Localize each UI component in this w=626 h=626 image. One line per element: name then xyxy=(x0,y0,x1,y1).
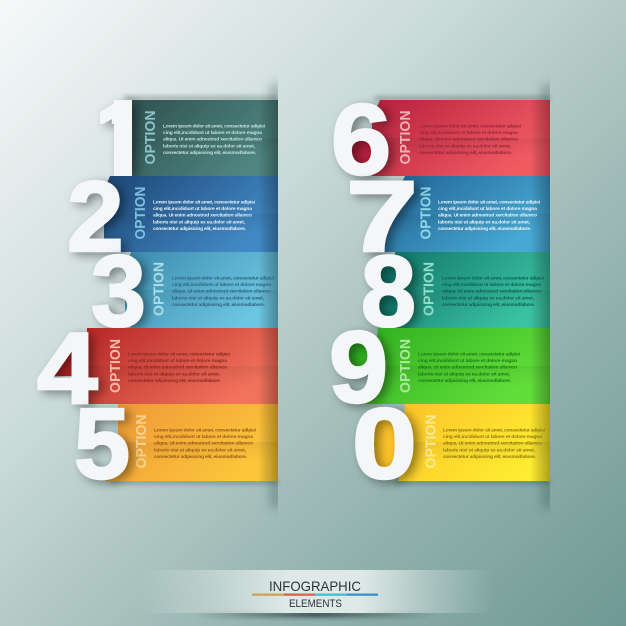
text block 7: aliqua. Ut enim adnostrud xercitation ullamco xyxy=(438,213,537,219)
bar 0 xyxy=(398,404,550,481)
shadow below right bars xyxy=(395,480,550,484)
text block 2: Lorem ipsum dolor sit amet, consectetur adipisi xyxy=(153,200,256,206)
bar 6 xyxy=(372,100,550,176)
option label 3: OPTION xyxy=(151,262,168,316)
text block 0: consectetur adipisicing elit, eiusmodlabore. xyxy=(443,454,537,460)
bar 3 xyxy=(125,252,278,328)
colour rule xyxy=(252,594,378,596)
text block 5 xyxy=(154,428,257,460)
text block 9: laboris nisi ut aliquip ex ea.dolor sit amet, xyxy=(418,371,511,377)
text block 0: aliqua. Ut enim adnostrud xercitation ullamco xyxy=(443,441,542,447)
counter of digit 4 xyxy=(48,346,74,376)
digit 1 xyxy=(99,96,141,176)
text block 1: laboris nisi ut aliquip ex ea.dolor sit amet, xyxy=(163,143,256,149)
text block 8: cing elit,incididunt ut labore et dolore magna xyxy=(442,282,541,288)
text block 1: cing elit,incididunt ut labore et dolore magna xyxy=(163,130,262,136)
row 7 xyxy=(346,160,550,273)
text block 0: laboris nisi ut aliquip ex ea.dolor sit amet, xyxy=(443,447,536,453)
title: infographic: INFOGRAPHIC xyxy=(269,579,361,594)
counter of digit 9 xyxy=(342,338,374,370)
text block 7 xyxy=(438,200,541,232)
text block 6: aliqua. Ut enim adnostrud xercitation ullamco xyxy=(419,137,518,143)
option label 0: OPTION xyxy=(423,414,440,468)
option label 8: OPTION xyxy=(421,262,438,316)
text block 4 xyxy=(128,352,231,384)
text block 6: consectetur adipisicing elit, eiusmodlabore. xyxy=(419,150,513,156)
text block 0 xyxy=(443,428,546,460)
text block 4: laboris nisi ut aliquip ex ea.dolor sit amet, xyxy=(128,371,221,377)
text block 5: aliqua. Ut enim adnostrud xercitation ullamco xyxy=(154,441,253,447)
bar 1 xyxy=(130,100,278,176)
text block 2: laboris nisi ut aliquip ex ea.dolor sit amet, xyxy=(153,219,246,225)
option label 6: OPTION xyxy=(398,110,414,164)
digit 1: 1 xyxy=(88,83,148,196)
bottom title banner xyxy=(140,570,492,617)
text block 9 xyxy=(418,352,521,384)
text block 8 xyxy=(442,276,545,308)
row 5 xyxy=(74,388,278,500)
shadow above the right bars xyxy=(375,96,550,101)
banner strip xyxy=(140,570,492,613)
text block 8: consectetur adipisicing elit, eiusmodlabore. xyxy=(442,302,536,308)
option label 9: OPTION xyxy=(398,339,414,393)
digit 8: 8 xyxy=(361,236,416,348)
row 8 xyxy=(361,236,550,348)
panel: left column fold shadow xyxy=(270,84,282,508)
counter of digit 0 xyxy=(367,413,403,473)
bar 7 xyxy=(366,176,550,252)
text block 3: cing elit,incididunt ut labore et dolore magna xyxy=(172,282,271,288)
text block 6: cing elit,incididunt ut labore et dolore magna xyxy=(419,130,518,136)
text block 2: consectetur adipisicing elit, eiusmodlabore. xyxy=(153,226,247,232)
text block 5: laboris nisi ut aliquip ex ea.dolor sit amet, xyxy=(154,447,247,453)
option label 5: OPTION xyxy=(134,414,150,468)
shadow above the left bars xyxy=(125,96,278,101)
digit 2: 2 xyxy=(67,160,124,273)
text block 4: Lorem ipsum dolor sit amet, consectetur adipisi xyxy=(128,352,231,358)
text block 8: aliqua. Ut enim adnostrud xercitation ullamco xyxy=(442,289,541,295)
text block 3: laboris nisi ut aliquip ex ea.dolor sit amet, xyxy=(172,295,265,301)
text block 5: consectetur adipisicing elit, eiusmodlabore. xyxy=(154,454,248,460)
row 4 xyxy=(37,313,278,425)
text block 7: cing elit,incididunt ut labore et dolore magna xyxy=(438,206,537,212)
text block 9: consectetur adipisicing elit, eiusmodlabore. xyxy=(418,378,512,384)
option label 7: OPTION xyxy=(417,187,434,240)
text block 3: consectetur adipisicing elit, eiusmodlabore. xyxy=(172,302,266,308)
text block 4: consectetur adipisicing elit, eiusmodlabore. xyxy=(128,378,222,384)
text block 4: aliqua. Ut enim adnostrud xercitation ullamco xyxy=(128,365,227,371)
text block 2: cing elit,incididunt ut labore et dolore magna xyxy=(153,206,252,212)
digit 3: 3 xyxy=(91,236,146,348)
row 2 xyxy=(67,160,278,273)
digit 7: 7 xyxy=(346,160,418,273)
row 9 xyxy=(329,310,550,423)
bar 2 xyxy=(104,176,278,252)
shadow below left bars xyxy=(110,480,278,484)
text block 5: cing elit,incididunt ut labore et dolore magna xyxy=(154,434,253,440)
text block 7: laboris nisi ut aliquip ex ea.dolor sit amet, xyxy=(438,219,531,225)
digit 9: 9 xyxy=(329,310,388,423)
text block 3 xyxy=(172,276,275,308)
text block 4: cing elit,incididunt ut labore et dolore magna xyxy=(128,358,227,364)
row 3 xyxy=(91,236,278,348)
text block 3: aliqua. Ut enim adnostrud xercitation ullamco xyxy=(172,289,271,295)
subtitle: elements: ELEMENTS xyxy=(289,598,342,610)
text block 3: Lorem ipsum dolor sit amet, consectetur adipisi xyxy=(172,276,275,282)
option label 4: OPTION xyxy=(108,339,124,393)
text block 2 xyxy=(153,200,256,232)
text block 1: aliqua. Ut enim adnostrud xercitation ullamco xyxy=(163,137,262,143)
text block 5: Lorem ipsum dolor sit amet, consectetur adipisi xyxy=(154,428,257,434)
panel: middle column fold shadow xyxy=(542,84,554,508)
text block 2: aliqua. Ut enim adnostrud xercitation ullamco xyxy=(153,213,252,219)
text block 0: cing elit,incididunt ut labore et dolore magna xyxy=(443,434,542,440)
bar 8 xyxy=(395,252,550,328)
text block 8: Lorem ipsum dolor sit amet, consectetur adipisi xyxy=(442,276,545,282)
text block 6 xyxy=(419,124,522,156)
text block 7: Lorem ipsum dolor sit amet, consectetur adipisi xyxy=(438,200,541,206)
bar 5 xyxy=(105,404,278,481)
text block 1: consectetur adipisicing elit, eiusmodlabore. xyxy=(163,150,257,156)
text block 7: consectetur adipisicing elit, eiusmodlabore. xyxy=(438,226,532,232)
counters of digit 8 xyxy=(375,261,401,319)
row 6 xyxy=(331,83,550,196)
counter of digit 6 xyxy=(345,135,377,167)
digit 4: 4 xyxy=(37,313,98,425)
text block 0: Lorem ipsum dolor sit amet, consectetur adipisi xyxy=(443,428,546,434)
row 1 xyxy=(99,96,278,176)
text block 9: aliqua. Ut enim adnostrud xercitation ullamco xyxy=(418,365,517,371)
text block 8: laboris nisi ut aliquip ex ea.dolor sit amet, xyxy=(442,295,535,301)
option label 2: OPTION xyxy=(132,187,148,240)
bar 4 xyxy=(87,328,278,404)
text block 6: laboris nisi ut aliquip ex ea.dolor sit amet, xyxy=(419,143,512,149)
text block 9: Lorem ipsum dolor sit amet, consectetur adipisi xyxy=(418,352,521,358)
text block 6: Lorem ipsum dolor sit amet, consectetur adipisi xyxy=(419,124,522,130)
bar 9 xyxy=(362,328,550,404)
digit 5: 5 xyxy=(74,388,130,500)
text block 9: cing elit,incididunt ut labore et dolore magna xyxy=(418,358,517,364)
row 0 xyxy=(352,387,550,500)
option label 1: OPTION xyxy=(143,110,159,164)
banner shadow xyxy=(195,612,435,617)
digit 0: 0 xyxy=(352,387,417,500)
digit 6: 6 xyxy=(331,83,391,196)
text block 1: Lorem ipsum dolor sit amet, consectetur adipisi xyxy=(163,124,266,130)
text block 1 xyxy=(163,124,266,156)
